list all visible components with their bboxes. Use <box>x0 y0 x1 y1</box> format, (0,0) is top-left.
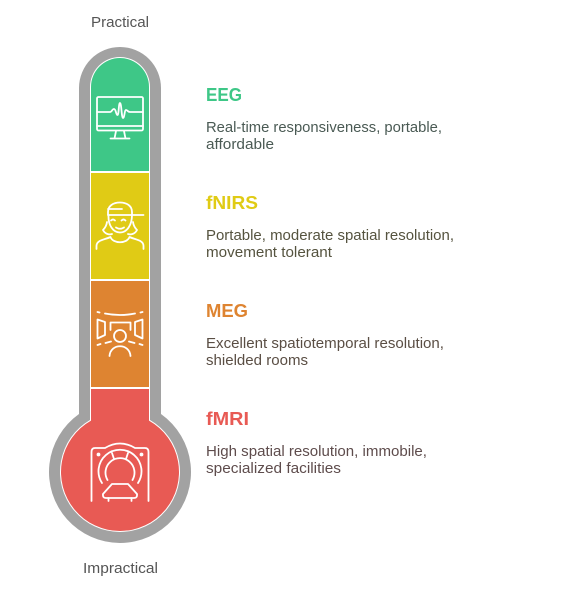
text: fMRI description: High spatial resolution, immobile, <box>206 443 427 460</box>
heading: MEG: MEG <box>206 300 248 321</box>
segment: MEG orange <box>91 281 149 387</box>
text: EEG description: affordable <box>206 136 274 153</box>
segment: EEG green <box>91 58 149 171</box>
icon: fMRI machine <box>92 444 148 501</box>
text: MEG description: Excellent spatiotemporal resolution, <box>206 335 444 352</box>
item: fNIRS <box>206 192 454 261</box>
heading: EEG: EEG <box>206 84 242 105</box>
segment: fNIRS yellow <box>91 173 149 279</box>
thermometer gray casing <box>49 47 191 543</box>
thermometer white outline <box>60 57 180 532</box>
thermometer <box>49 47 191 543</box>
icon: fNIRS person with cap <box>96 202 144 249</box>
icon: MEG scanner <box>98 312 142 356</box>
text: MEG description: shielded rooms <box>206 352 308 369</box>
text: EEG description: Real-time responsiveness, portable, <box>206 119 442 136</box>
item: fMRI <box>206 408 427 477</box>
item: MEG <box>206 300 444 369</box>
heading: fNIRS: fNIRS <box>206 192 258 213</box>
text: fNIRS description: movement tolerant <box>206 244 333 261</box>
label: Practical: Practical <box>91 14 149 31</box>
icon: EEG monitor <box>97 97 143 138</box>
item: EEG <box>206 84 442 153</box>
heading: fMRI: fMRI <box>206 408 249 429</box>
label: Impractical: Impractical <box>83 560 158 577</box>
text: fNIRS description: Portable, moderate spatial resolution, <box>206 227 454 244</box>
segment: fMRI red bulb <box>61 389 179 531</box>
text: fMRI description: specialized facilities <box>206 460 341 477</box>
